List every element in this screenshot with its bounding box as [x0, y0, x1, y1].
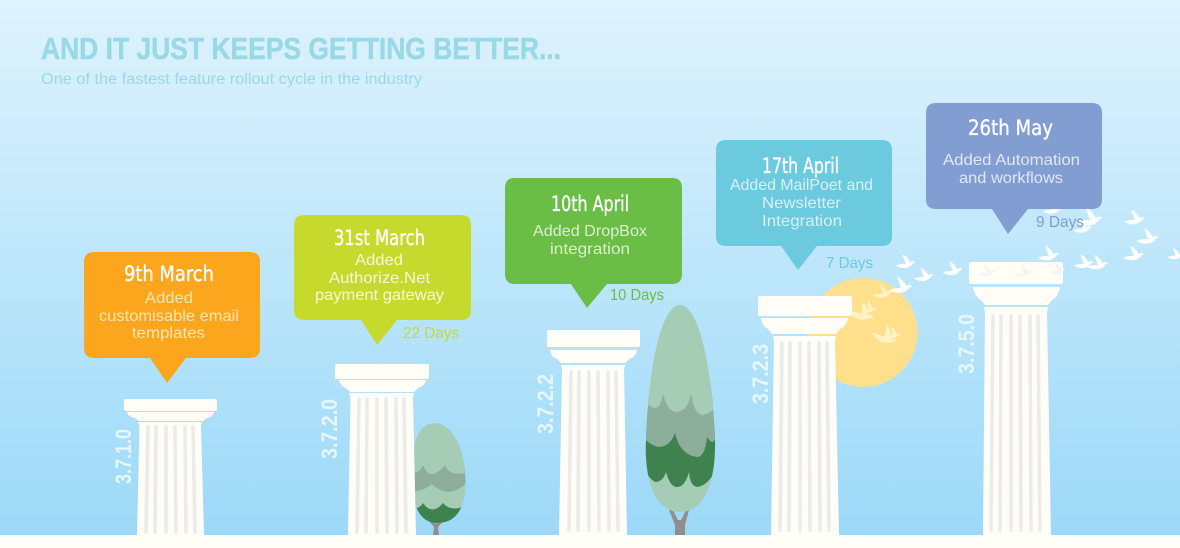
column 3.7.1.0	[124, 399, 217, 535]
version label 3.7.1.0: 3.7.1.0	[111, 429, 136, 484]
callout: 10th April: 10th April	[551, 192, 629, 216]
callout: 31st March: Added	[355, 252, 403, 269]
callout: 9th March: Added	[145, 290, 193, 307]
callout: 26th May: 26th May	[968, 116, 1053, 140]
callout: 17th April: Integration	[762, 213, 842, 230]
ground	[0, 535, 1180, 548]
callout: 31st March: Authorize.Net	[329, 270, 431, 287]
callout: 26th May	[926, 103, 1102, 234]
version label 3.7.2.2: 3.7.2.2	[533, 374, 558, 434]
version label 3.7.5.0: 3.7.5.0	[954, 314, 979, 374]
callout: 10th April: Added DropBox	[533, 223, 647, 240]
version label 3.7.2.3: 3.7.2.3	[748, 344, 773, 404]
callout: 10th April: integration	[550, 241, 630, 258]
interval: 22 Days: 22 Days	[403, 325, 459, 342]
callout: 31st March: 31st March	[334, 226, 425, 250]
callout: 17th April: Newsletter	[762, 195, 842, 212]
column 3.7.2.0	[335, 364, 429, 535]
callout: 9th March	[84, 252, 260, 383]
callout: 31st March: payment gateway	[315, 287, 444, 304]
callout: 17th April	[716, 140, 892, 270]
title: AND IT JUST KEEPS GETTING BETTER...	[41, 31, 561, 66]
flock of birds	[847, 201, 1180, 348]
faint birds passing over the capital	[977, 263, 1065, 277]
callout: 26th May: and workflows	[959, 170, 1063, 187]
small tree	[414, 423, 466, 535]
callout: 17th April: 17th April	[762, 154, 839, 178]
column 3.7.5.0	[969, 262, 1063, 535]
callout: 31st March	[294, 215, 471, 345]
interval: 7 Days: 7 Days	[826, 255, 873, 272]
sun	[808, 278, 918, 387]
callout: 26th May: Added Automation	[943, 152, 1080, 169]
interval: 9 Days: 9 Days	[1036, 214, 1084, 231]
callout: 9th March: templates	[132, 325, 205, 342]
version label 3.7.2.0: 3.7.2.0	[317, 399, 342, 459]
callout: 9th March: customisable email	[99, 308, 239, 325]
callout: 17th April: Added MailPoet and	[730, 177, 873, 194]
column 3.7.2.3	[758, 296, 852, 535]
subtitle: One of the fastest feature rollout cycle in the industry	[41, 71, 422, 88]
column 3.7.2.2	[547, 330, 640, 535]
interval: 10 Days: 10 Days	[610, 287, 664, 304]
large tree	[646, 305, 716, 535]
callout: 9th March: 9th March	[124, 262, 214, 286]
callout: 10th April	[505, 178, 682, 308]
